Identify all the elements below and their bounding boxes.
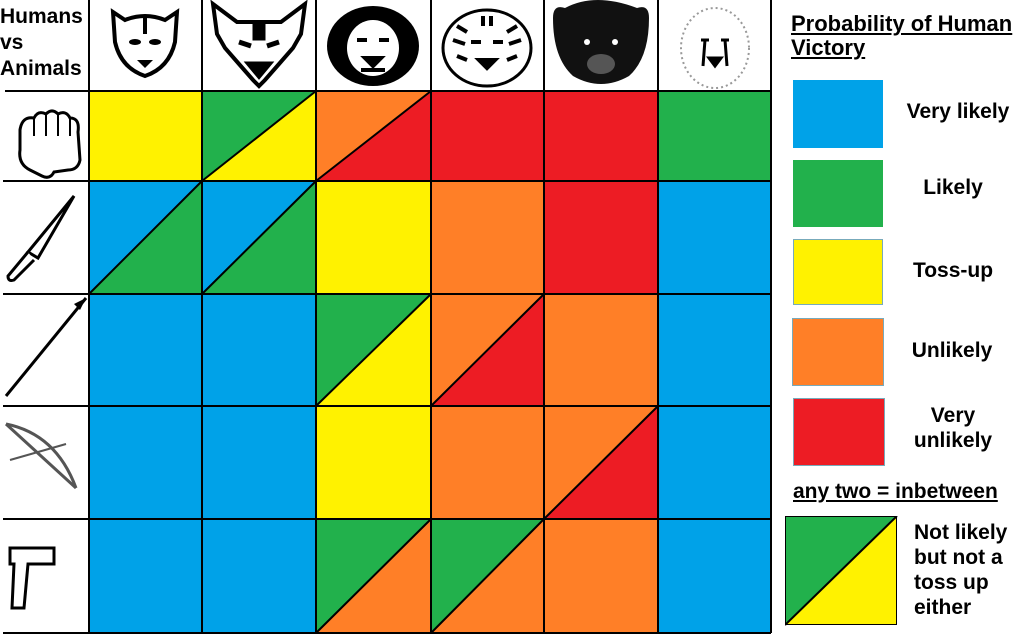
legend: very unlikely	[793, 398, 992, 466]
legend: any two note: any two = inbetween	[793, 480, 998, 503]
icon: bear	[553, 0, 649, 84]
legend: toss-up: Toss-up	[913, 259, 993, 282]
legend: very likely: Very likely	[907, 100, 1009, 123]
icon: gun	[10, 548, 54, 608]
corner title: Animals	[0, 57, 82, 80]
legend title: Victory	[791, 35, 865, 60]
legend: unlikely: Unlikely	[912, 339, 992, 362]
row cells	[89, 91, 771, 633]
legend: likely: Likely	[923, 176, 983, 199]
legend: toss-up	[793, 239, 993, 305]
icon: spear	[6, 298, 86, 396]
icon: cougar	[113, 12, 177, 76]
icon: tiger	[443, 10, 531, 86]
legend: very likely	[793, 80, 1010, 148]
icon: knife	[8, 196, 74, 280]
legend title: Probability of Human	[791, 11, 1012, 36]
legend: very unlikely: Very	[931, 404, 975, 427]
main grid chart	[3, 0, 772, 634]
legend: likely	[793, 160, 983, 227]
legend: split swatch: either	[914, 596, 971, 619]
icon: cheetah	[681, 8, 749, 88]
legend	[785, 11, 1012, 626]
corner title: Humans	[0, 5, 83, 28]
icon: bow	[6, 424, 76, 488]
legend: split swatch: toss up	[914, 571, 989, 594]
legend: split swatch	[785, 516, 1008, 626]
icon: fist	[20, 111, 80, 177]
legend title	[791, 11, 1012, 60]
icon: lion	[327, 6, 419, 86]
icon: wolf	[213, 4, 305, 86]
legend: split swatch: but not a	[914, 546, 1003, 569]
corner title	[0, 5, 83, 80]
legend: very unlikely: unlikely	[914, 429, 992, 452]
corner title: vs	[0, 31, 23, 54]
legend: unlikely	[792, 318, 992, 386]
legend: split swatch: Not likely	[914, 521, 1007, 544]
